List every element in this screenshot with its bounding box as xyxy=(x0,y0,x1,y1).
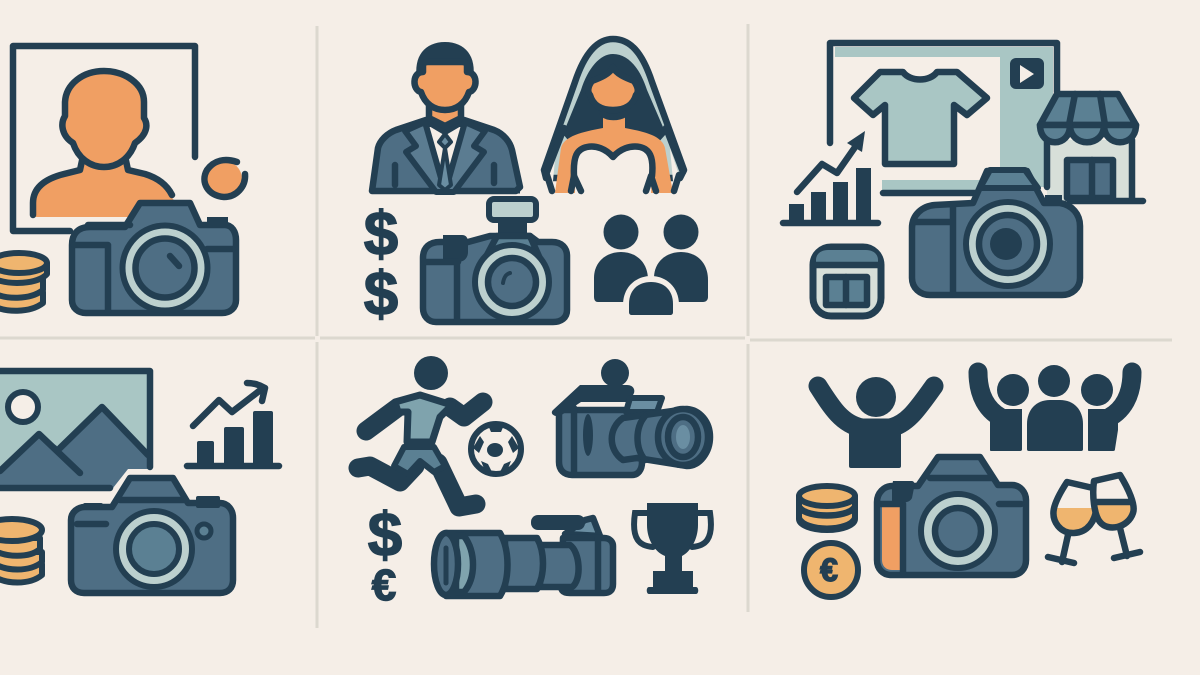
icon: cheering person xyxy=(818,377,934,468)
icon: groom xyxy=(370,42,520,192)
icon: coin stack xyxy=(0,253,47,311)
icon: cheering group xyxy=(978,365,1132,451)
icon: camera xyxy=(912,170,1080,295)
panel: portrait photography xyxy=(0,46,245,313)
icon: runner with ball xyxy=(358,356,483,507)
panel: ecommerce photography xyxy=(783,43,1143,316)
text: currency symbols: € xyxy=(372,561,396,610)
icon: camera xyxy=(877,457,1026,575)
icon: browser frame xyxy=(830,43,1057,193)
icon: growth chart xyxy=(187,383,279,466)
text: dollar signs: $ xyxy=(364,260,398,329)
icon: small orange circle xyxy=(204,160,245,197)
icon: growth chart xyxy=(783,131,878,223)
text: currency symbols: $ xyxy=(368,501,402,570)
icon: portrait person xyxy=(33,71,176,217)
icon: product widget xyxy=(813,247,881,316)
icon: play button xyxy=(1010,58,1044,89)
panel: sports photography xyxy=(358,356,711,610)
icon: guests group xyxy=(594,214,708,316)
text: dollar signs xyxy=(364,200,398,329)
text: dollar signs: $ xyxy=(364,200,398,269)
icon: camera xyxy=(71,478,233,593)
icon: camera with flash xyxy=(423,199,567,322)
icon: coin stack xyxy=(799,486,855,530)
icon: portrait frame xyxy=(13,46,195,231)
icon: t-shirt xyxy=(854,72,987,164)
panel: wedding photography xyxy=(364,39,708,329)
icon: toasting glasses xyxy=(1048,475,1140,563)
icon: euro coin xyxy=(804,543,858,597)
icon: coin stack xyxy=(0,519,42,582)
icon: soccer ball xyxy=(471,424,521,474)
icon: bride xyxy=(544,39,684,193)
panel: event photography xyxy=(799,365,1140,597)
icon: landscape picture xyxy=(0,371,150,488)
icon: trophy xyxy=(634,503,711,594)
text: currency symbols xyxy=(368,501,402,610)
icon: euro coin: € xyxy=(820,552,838,588)
icon: camera xyxy=(72,203,236,313)
icon: telephoto camera xyxy=(552,359,710,475)
icon: storefront xyxy=(1040,94,1143,201)
panel: landscape photography xyxy=(0,371,279,593)
icon: DSLR with long lens xyxy=(434,515,613,596)
